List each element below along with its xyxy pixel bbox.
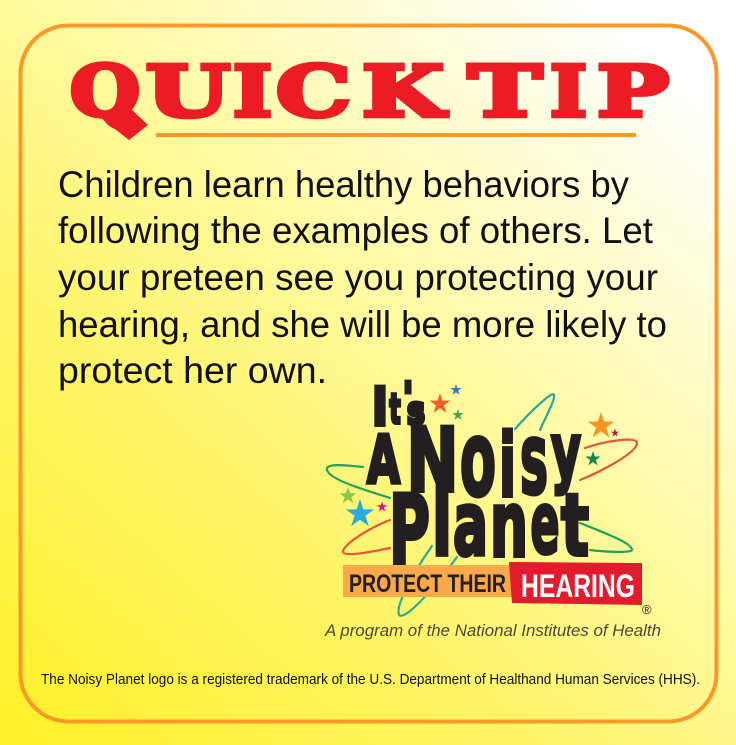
logo: It's A Noisy Planet [324, 375, 661, 640]
title: QUICK TIP [70, 50, 669, 140]
title: QUICK TIP: P [597, 50, 669, 133]
tip body text: following the examples of others. Let [58, 210, 654, 251]
logo tagline: A program of the National Institutes of Health [324, 622, 661, 640]
banner: protect their [343, 565, 512, 598]
title: QUICK TIP: T [468, 50, 542, 133]
trademark footer note: The Noisy Planet logo is a registered trademark of the U.S. Department of Healthand Human Services (HHS). [41, 672, 700, 688]
tip body text [58, 164, 667, 391]
title: QUICK TIP: K [362, 50, 447, 133]
tip body text: hearing, and she will be more likely to [58, 304, 667, 345]
tip body text: Children learn healthy behaviors by [58, 164, 629, 205]
title: QUICK TIP: I [550, 50, 587, 133]
title: QUICK TIP: I [233, 50, 272, 133]
logo wordmark [367, 375, 589, 586]
logo orbit rings [327, 394, 637, 616]
logo wordmark: P [389, 476, 430, 586]
logo wordmark: y [551, 408, 581, 497]
logo wordmark: a [453, 473, 488, 576]
logo wordmark: s [520, 403, 548, 517]
logo wordmark: ' [403, 375, 413, 421]
title: QUICK TIP: C [276, 50, 351, 133]
banner: hearing [509, 562, 642, 605]
logo wordmark: o [460, 400, 496, 520]
title underline [156, 133, 636, 137]
title: QUICK TIP: U [146, 50, 230, 133]
registered mark: ® [642, 602, 652, 617]
logo wordmark: s [407, 389, 425, 433]
logo wordmark: A [367, 422, 400, 499]
banner: protect their: PROTECT THEIR [349, 570, 506, 598]
logo wordmark: N [406, 409, 458, 512]
logo wordmark: I [372, 377, 388, 438]
logo wordmark: e [530, 474, 560, 574]
logo stars [339, 384, 619, 526]
tip body text: your preteen see you protecting your [58, 257, 658, 298]
logo wordmark: i [499, 415, 516, 517]
banner: hearing: HEARING [521, 568, 635, 604]
tip body text: protect her own. [58, 350, 327, 391]
logo wordmark: l [432, 472, 452, 576]
logo wordmark: t [561, 476, 589, 576]
logo wordmark: t [390, 385, 400, 433]
title: QUICK TIP: Q [70, 50, 140, 133]
logo wordmark: n [490, 473, 528, 578]
